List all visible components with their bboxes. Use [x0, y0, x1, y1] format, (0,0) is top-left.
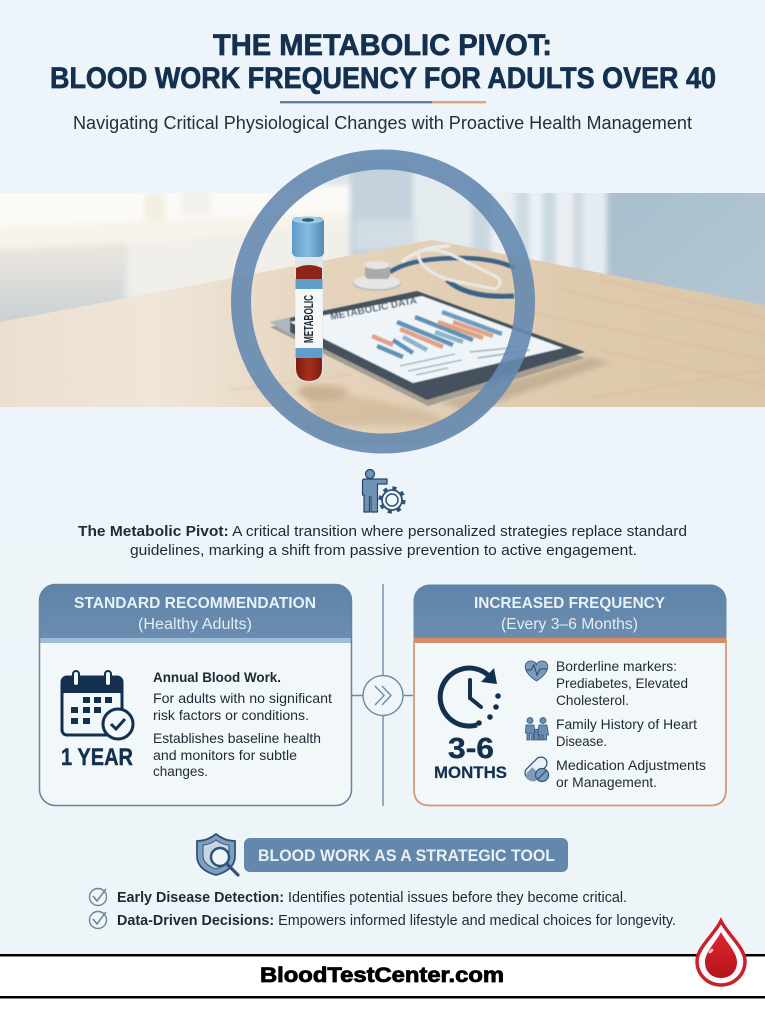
panel header [413, 584, 727, 643]
panel list text: Prediabetes, Elevated [556, 675, 688, 691]
panel header [39, 584, 352, 643]
footer site name: BloodTestCenter.com [260, 964, 504, 987]
tablet bar chart [372, 312, 502, 357]
icon: calendar [62, 671, 133, 739]
panel: increased frequency: MONTHS [434, 763, 507, 782]
panel body text: risk factors or conditions. [153, 707, 309, 723]
intro text: guidelines, marking a shift from passive prevention to active engagement. [130, 542, 637, 559]
panel body text: Establishes baseline health [153, 730, 321, 746]
icon: heart [525, 661, 548, 681]
intro text: The Metabolic Pivot: A critical transition where personalized strategies replace standard [78, 523, 687, 540]
title divider [280, 101, 486, 103]
panel body text: For adults with no significant [153, 690, 332, 706]
heading: blood work as a strategic tool: BLOOD WORK AS A STRATEGIC TOOL [258, 846, 555, 865]
panel: increased frequency [413, 584, 727, 806]
stethoscope [353, 246, 515, 296]
header text: STANDARD RECOMMENDATION [74, 595, 316, 612]
icon: family [526, 718, 548, 740]
icon: check [90, 912, 106, 928]
panel list text: Borderline markers: [556, 658, 677, 674]
blood tube: METABOLIC [301, 295, 316, 343]
icon: shield with magnifier [197, 834, 238, 875]
panel body text: Annual Blood Work. [153, 669, 281, 685]
footer band [0, 954, 765, 1024]
subtitle: Navigating Critical Physiological Changes with Proactive Health Management [73, 112, 692, 133]
table top [0, 240, 765, 445]
hero photo: desk with blood tube and tablet [0, 170, 765, 434]
tablet [270, 291, 585, 406]
panel: increased frequency: (Every 3–6 Months) [501, 616, 638, 633]
tablet: METABOLIC DATA [329, 295, 418, 323]
heading: blood work as a strategic tool [244, 838, 568, 872]
panel list text [556, 658, 706, 790]
panel body text: and monitors for subtle [153, 747, 297, 763]
icon: check [90, 888, 106, 906]
title [50, 29, 716, 95]
panel: standard recommendation: (Healthy Adults) [138, 616, 252, 633]
room wall [124, 174, 471, 298]
1 year label: 1 YEAR [61, 744, 133, 771]
tablet table rows [400, 347, 530, 375]
table shadow [300, 385, 460, 425]
panel list text: Cholesterol. [556, 692, 629, 708]
panel body text [153, 669, 332, 779]
panel list text: Medication Adjustments [556, 757, 706, 773]
intro text [78, 523, 687, 559]
benefit: data-driven decisions: Data-Driven Decisions: Empowers informed lifestyle and medical choices for longevity. [117, 913, 676, 929]
panel list text: or Management. [556, 774, 657, 790]
header text: INCREASED FREQUENCY [474, 595, 665, 612]
icon: pills [523, 755, 549, 782]
icon: person with gear [362, 470, 404, 512]
benefit: early disease detection: Early Disease Detection: Identifies potential issues before they become critical. [117, 890, 627, 906]
center divider with arrow [352, 584, 413, 806]
blood tube [292, 216, 348, 400]
panel: standard recommendation [39, 584, 352, 806]
3-6 months label: 3-6 [448, 733, 494, 765]
icon: clock with arrow [440, 668, 501, 726]
title: THE METABOLIC PIVOT: [213, 29, 552, 62]
hero ring [241, 160, 525, 444]
panel list text: Disease. [556, 733, 607, 749]
panel body text: changes. [153, 763, 208, 779]
panel list text: Family History of Heart [556, 716, 697, 732]
wood grain [230, 376, 730, 390]
room details [0, 165, 765, 325]
icon: blood drop logo [697, 921, 745, 985]
